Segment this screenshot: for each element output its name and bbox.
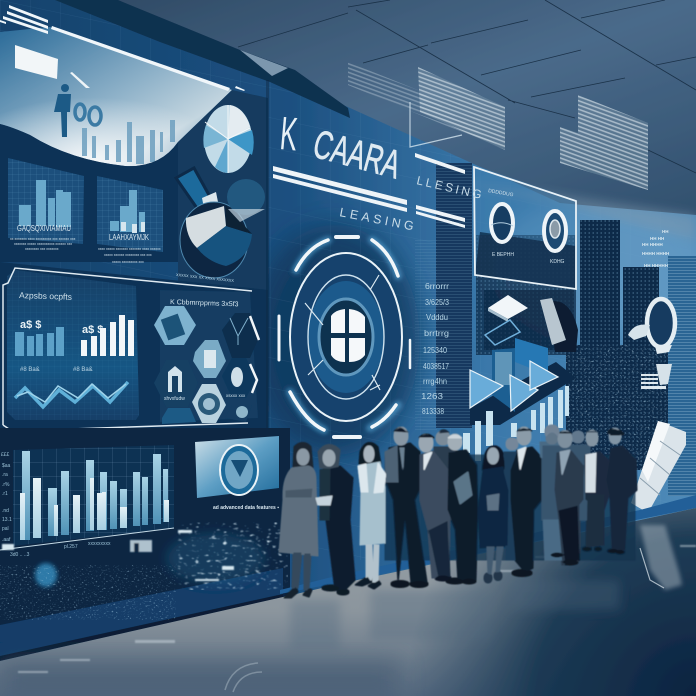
title: CAARA (309, 122, 405, 188)
ceiling (55, 0, 696, 240)
baseline labels (10, 541, 111, 558)
blue outline shape (485, 320, 520, 345)
hex 2 (193, 340, 226, 378)
axis labels: .r1 (2, 491, 8, 497)
axis labels (1, 452, 12, 543)
floor (0, 508, 696, 696)
baseline labels: 3d0 .. ..3 (10, 552, 30, 558)
3D shapes (463, 295, 578, 461)
group of business people (279, 425, 637, 598)
hexagon panel: K Cbbmrrpprms 3x5f3 (170, 299, 239, 308)
mini bars (82, 120, 175, 164)
person: man with tie, laughing (510, 427, 542, 576)
chart panel 1 (8, 158, 84, 251)
dark figure (548, 301, 578, 352)
person: woman in dark dress (478, 446, 509, 583)
right wall text cluster (642, 229, 669, 268)
person: man in grey suit (419, 434, 451, 581)
person: woman in coat (279, 442, 318, 598)
blurred city lights (0, 522, 288, 620)
panel labels: DDDDDUG (488, 188, 514, 198)
riser bars (463, 386, 569, 461)
chart panel 2: LAAHXAYMJK (109, 233, 150, 242)
white sign (15, 45, 58, 79)
right wall text cluster: HH HHHH (642, 242, 663, 247)
central target ring (279, 237, 410, 437)
title stripes (273, 153, 465, 228)
hex 8 (225, 405, 252, 422)
wall numbers column (421, 282, 449, 416)
axis labels: .r% (2, 482, 10, 488)
right wall text cluster: HH HH (650, 236, 664, 241)
gauge left (491, 204, 513, 242)
small video screen: ad advanced data features ▪ (213, 505, 279, 511)
panel labels (488, 188, 565, 265)
frame (474, 167, 576, 289)
person: back row (434, 425, 590, 560)
chart panel 2: xxxx xxxxx xxxxxxx xxxxxxx xxxx xxxxxx (98, 247, 161, 251)
subtitle leasing: LEASING (338, 205, 418, 234)
glare (70, 72, 90, 88)
person: man at right end (606, 428, 637, 554)
legend labels (20, 367, 93, 373)
wall numbers column: 813338 (422, 407, 444, 416)
panel heading: Azpsbs ocpfts (19, 290, 72, 302)
bottom bar chart (0, 445, 174, 558)
skyline buildings (415, 163, 696, 496)
hex 3 (222, 313, 260, 358)
wall numbers column: rrrg4hn (423, 377, 447, 386)
axis labels: pal (2, 526, 9, 532)
wall numbers column: brrtrrg (424, 329, 449, 338)
person: older man with bag (446, 434, 478, 584)
person: tall man with tie (385, 427, 428, 588)
hexagon panel: shvxfudw (164, 396, 185, 402)
title: K (278, 106, 300, 160)
line graph (15, 382, 128, 407)
blue shapes (75, 104, 101, 125)
right wall text cluster: HH HHHHH (644, 263, 668, 268)
baseline (0, 528, 174, 550)
chart panel 2: xxxxx xxxxxx xxxxxxxx xxx xxx (104, 253, 152, 257)
vertical dark pillar (266, 80, 269, 590)
small bars (15, 327, 64, 356)
right ring icon (628, 299, 675, 354)
triangles (470, 361, 558, 411)
white diamond (488, 295, 528, 319)
chart panel 1: GAQSQXIVIAMIAU (17, 224, 71, 233)
right wall text cluster: HHHH HHHH (642, 251, 669, 256)
tick lines (305, 275, 380, 390)
white object reflection (640, 525, 682, 590)
white rolled object (631, 421, 686, 513)
chart panel 2 (97, 176, 163, 264)
wall numbers column: Vdddu (426, 313, 448, 322)
axis labels: 13.1 (2, 517, 12, 523)
dark upper-left wall band (0, 90, 268, 290)
floating panel with gauges (474, 165, 576, 290)
wall numbers column: 4038517 (423, 362, 449, 371)
arrow and lower pie: xxxxx xxx xx xxxx xxxxxxx (176, 272, 235, 284)
baseline labels: pl.257 (64, 544, 78, 550)
axis labels: .ra (2, 472, 8, 478)
lower dark wall (0, 428, 290, 661)
legend labels: #8 Ba& (73, 367, 93, 373)
top light bars (0, 5, 245, 91)
ceiling light panel 1 (348, 62, 505, 150)
chevrons (250, 316, 259, 393)
title (278, 106, 405, 188)
hex 7 (162, 408, 196, 424)
glowing arcs (279, 237, 410, 437)
dollar labels: a$ $ (82, 324, 103, 336)
axis labels: £££ (1, 452, 10, 458)
main data panel (0, 262, 268, 432)
hexagon panel: xsxxx xxx (226, 393, 246, 398)
axis labels: .nd (2, 508, 9, 514)
wall numbers column: 3/625/3 (425, 298, 449, 307)
arrow and lower pie (176, 168, 265, 284)
chart panel 1: xxxxxxx xxxxx xxxxxxxxxx xxxxxx xxx (14, 242, 72, 246)
chart panel 1: xxxxxxxx xxx xxxxxxx (25, 247, 59, 251)
dollar labels (20, 319, 103, 336)
wall numbers column: 6rrorrr (425, 282, 449, 291)
blue wall skirting right (280, 495, 696, 594)
reflection ring (225, 663, 262, 692)
wall numbers column: 125340 (423, 346, 447, 355)
person: man with light shirt (582, 430, 610, 552)
panel labels: KDHG (550, 259, 565, 265)
people reflections (290, 580, 620, 650)
small video screen (195, 436, 279, 511)
shadow mass behind people (385, 455, 635, 560)
small right icon stack (641, 364, 672, 389)
subtitle lesing upper: LLESING (415, 173, 486, 202)
right wall text cluster: HH (662, 229, 668, 234)
panel labels: E BEPHH (492, 252, 514, 258)
person: man in scarf (550, 430, 584, 565)
hex 4 (154, 360, 198, 407)
chart panel 1: xx xxxxxxx xxxx xxxxxxxxx xxx xxxxxx xxx (10, 237, 76, 241)
legend labels: #8 Ba& (20, 367, 40, 373)
white bars (81, 315, 134, 356)
presenter figure (54, 84, 71, 137)
center cross (331, 309, 365, 362)
chart panel 2: xxxxx xxxxxxxxx xxx (112, 260, 144, 264)
dollar labels: a$ $ (20, 319, 41, 331)
top-left presentation screen (0, 27, 232, 166)
hex 6 (222, 358, 256, 398)
person: man holding papers (316, 444, 355, 595)
pie chart (203, 105, 254, 173)
bars (22, 451, 168, 540)
wall numbers column: 1263 (421, 392, 444, 401)
axis labels: $aa (2, 463, 11, 469)
floor reflection glints (18, 545, 696, 673)
baseline labels: xxxxxxxxx (88, 541, 111, 547)
hex 5 (192, 384, 226, 423)
gauge right (544, 211, 566, 251)
panel frame (3, 268, 252, 425)
ceiling light panel 2 (560, 95, 648, 190)
person: woman in white dress (355, 443, 386, 589)
hexagon panel (154, 290, 260, 424)
axis labels: .aaf (2, 537, 11, 543)
hex 1 (154, 306, 196, 345)
